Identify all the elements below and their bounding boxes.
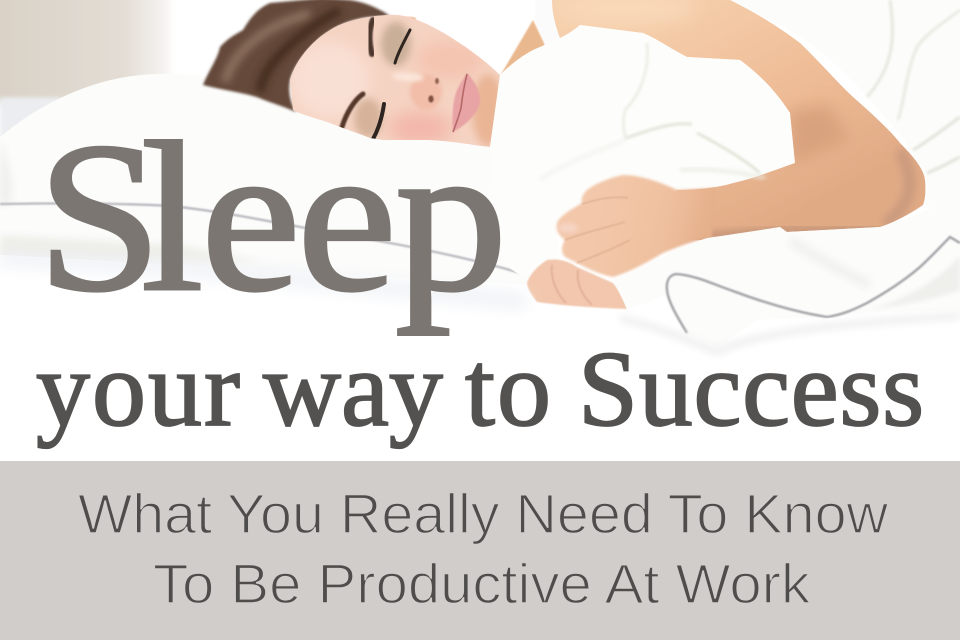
title: Sleep: Sleep (37, 99, 507, 336)
neck and shoulder strap (400, 0, 560, 76)
photo: woman sleeping in white bed (0, 0, 960, 354)
lower eye lashes (373, 104, 384, 139)
mattress sheet (0, 255, 960, 461)
upper hand (557, 175, 716, 277)
upper eye lashes (395, 30, 410, 63)
heading: your way to Success: way (263, 330, 470, 449)
pillow (0, 74, 535, 285)
back duvet, right (725, 0, 960, 220)
duvet, front upper (490, 25, 795, 282)
arm (540, 0, 940, 245)
lower eyebrow (342, 94, 363, 127)
lips (453, 73, 480, 132)
lower hand (527, 259, 627, 309)
duvet piping (667, 237, 960, 333)
hair (203, 0, 390, 112)
heading: your way to Success: your (36, 330, 271, 449)
subtitle line 1: What You Really Need To Know (78, 482, 889, 545)
nose (410, 74, 442, 110)
upper eyebrow (370, 20, 373, 54)
duvet, front lower with piping (613, 203, 960, 347)
face (290, 14, 500, 147)
heading: your way to Success: Success (578, 330, 925, 449)
subtitle band (0, 461, 960, 640)
pillow piping (0, 203, 524, 274)
photo background wall (0, 0, 170, 143)
subtitle line 2: To Be Productive At Work (153, 552, 811, 615)
eye socket shadows (381, 22, 411, 66)
heading: your way to Success: to (465, 330, 582, 449)
hands (527, 175, 716, 309)
